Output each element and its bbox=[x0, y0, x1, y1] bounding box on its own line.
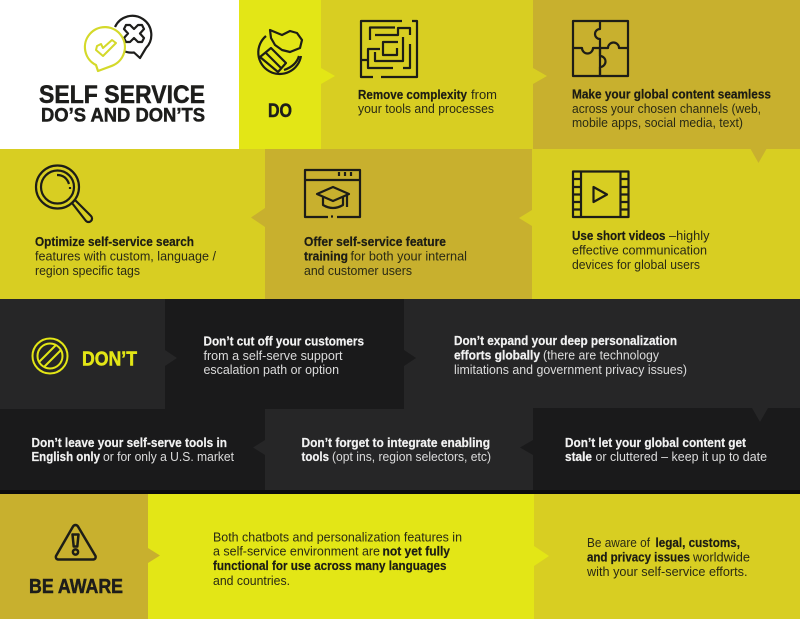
panel: dont let stale bbox=[533, 408, 800, 490]
text: cut off bbox=[204, 334, 364, 377]
text: legal: and privacy issues bbox=[587, 550, 690, 564]
heading: dont: DON’T bbox=[82, 348, 137, 370]
text: expand: Don’t expand your deep personalization bbox=[454, 334, 677, 348]
panel: dont leave bbox=[0, 409, 265, 490]
text: leave bbox=[32, 436, 235, 464]
text: training: and customer users bbox=[304, 264, 412, 278]
text: global content: across your chosen channels (web, bbox=[572, 102, 761, 116]
text: optimize: features with custom, language / bbox=[35, 250, 217, 264]
text: chatbots: Both chatbots and personalization features in bbox=[213, 530, 462, 544]
text: chatbots: functional for use across many languages bbox=[213, 559, 447, 573]
text: leave: or for only a U.S. market bbox=[103, 450, 235, 464]
text: chatbots: and countries. bbox=[213, 574, 290, 588]
text: remove complexity: Remove complexity bbox=[358, 88, 467, 102]
text: short videos bbox=[572, 229, 710, 272]
text: forget: tools bbox=[302, 450, 329, 464]
text: chatbots: a self-service environment are bbox=[213, 544, 380, 558]
text: short videos: devices for global users bbox=[572, 258, 700, 272]
icon: speech bubbles bbox=[85, 16, 151, 71]
heading: dos and donts: DO’S AND DON’TS bbox=[41, 106, 205, 126]
icon: training window bbox=[305, 170, 360, 217]
icon: warning triangle bbox=[56, 525, 96, 560]
text: chatbots bbox=[213, 530, 462, 588]
text: legal: Be aware of bbox=[587, 536, 650, 550]
heading: self service: SELF SERVICE bbox=[39, 81, 205, 109]
text: forget: (opt ins, region selectors, etc) bbox=[332, 450, 491, 464]
text: forget bbox=[302, 436, 491, 464]
text: short videos: Use short videos bbox=[572, 229, 666, 243]
text: legal: legal, customs, bbox=[656, 536, 740, 550]
text: global content: Make your global content seamless bbox=[572, 88, 771, 102]
heading: do: DO bbox=[268, 101, 292, 122]
icon: thumbs up bbox=[258, 30, 302, 74]
text: short videos: effective communication bbox=[572, 244, 707, 258]
text: optimize bbox=[35, 235, 217, 278]
text: training: training bbox=[304, 250, 348, 264]
text: legal: with your self-service efforts. bbox=[586, 565, 748, 579]
text: cut off: Don’t cut off your customers bbox=[204, 334, 364, 348]
text: expand: limitations and government privacy issues) bbox=[454, 363, 687, 377]
panel: chatbots note bbox=[148, 494, 534, 619]
text: expand: (there are technology bbox=[543, 348, 660, 362]
icon: film strip bbox=[573, 172, 628, 217]
text: leave: Don’t leave your self-serve tools in bbox=[32, 436, 227, 450]
panel: do label bbox=[239, 0, 321, 149]
panel: dont forget bbox=[265, 409, 533, 490]
text: training bbox=[304, 235, 467, 278]
text: leave: English only bbox=[32, 450, 100, 464]
text: stale: Don’t let your global content get bbox=[565, 436, 747, 450]
text: global content: mobile apps, social media, text) bbox=[572, 116, 743, 130]
icon: magnifier bbox=[36, 166, 92, 222]
text: optimize: region specific tags bbox=[35, 264, 140, 278]
text: training: Offer self-service feature bbox=[304, 235, 446, 249]
icon: prohibition sign bbox=[32, 338, 68, 374]
text: expand bbox=[454, 334, 687, 377]
text: global content bbox=[572, 88, 771, 130]
text: legal: worldwide bbox=[692, 550, 750, 564]
panel: global content seamless bbox=[533, 0, 800, 149]
text: training: for both your internal bbox=[350, 250, 467, 264]
text: short videos: –highly bbox=[669, 229, 710, 243]
panel: dont expand bbox=[404, 299, 800, 409]
text: stale: stale bbox=[565, 450, 592, 464]
text: stale bbox=[565, 436, 767, 464]
panel: remove complexity bbox=[321, 0, 533, 149]
text: remove complexity bbox=[358, 88, 497, 116]
text: cut off: from a self-serve support bbox=[204, 349, 343, 363]
text: remove complexity: your tools and processes bbox=[358, 102, 494, 116]
panel: legal note bbox=[534, 494, 800, 619]
icon: puzzle bbox=[573, 21, 628, 76]
panel: be aware label bbox=[0, 494, 148, 619]
panel: dont cut off bbox=[165, 299, 404, 409]
panel: optimize search bbox=[0, 149, 265, 299]
panel: title bbox=[0, 0, 239, 148]
text: expand: efforts globally bbox=[454, 348, 540, 362]
text: remove complexity: from bbox=[471, 88, 497, 102]
heading: be aware: BE AWARE bbox=[29, 576, 123, 598]
text: forget: Don’t forget to integrate enabling bbox=[302, 436, 490, 450]
panel: dont label bbox=[0, 299, 165, 409]
panel: training bbox=[265, 149, 532, 299]
text: chatbots: not yet fully bbox=[382, 544, 450, 558]
text: stale: or cluttered – keep it up to date bbox=[596, 450, 767, 464]
text: optimize: Optimize self-service search bbox=[35, 235, 194, 249]
text: cut off: escalation path or option bbox=[204, 363, 339, 377]
icon: maze bbox=[361, 21, 417, 77]
text: legal bbox=[586, 536, 750, 579]
panel: short videos bbox=[532, 148, 800, 299]
